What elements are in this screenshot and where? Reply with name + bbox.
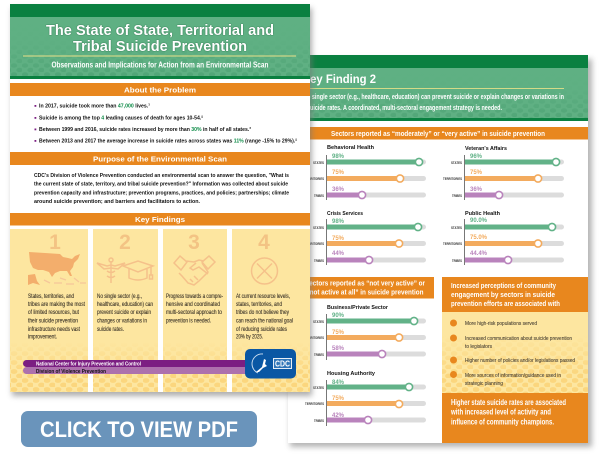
- panel: finding 1: of limited resources, but: [28, 310, 79, 316]
- chart: public health: Public Health: [465, 211, 501, 217]
- chart: business private sector: 58%: [332, 346, 345, 352]
- text block: purpose paragraph: around suicide prevention; and barriers and facilitators to action.: [34, 199, 200, 205]
- panel: finding 4: [232, 229, 310, 392]
- chart: veterans affairs: Veteran's Affairs: [465, 146, 507, 152]
- heading: active sectors: Sectors reported as “moderately” or “very active” in suicide prevention: [331, 131, 545, 138]
- chart: public health: STATES: [451, 226, 462, 230]
- heading: key findings: Key Findings: [135, 215, 185, 224]
- chart: business private sector: STATES: [313, 320, 324, 324]
- chart: veterans affairs: 75%: [470, 170, 483, 176]
- panel: finding 3: Progress towards a compre-: [166, 294, 223, 300]
- chart: public health: 90.0%: [470, 218, 488, 224]
- text block: problem bullets: Between 1999 and 2016, suicide rates increased by more than 30% in half of all states.³: [39, 126, 251, 133]
- panel: finding 1: their suicide prevention: [28, 318, 78, 324]
- chart: business private sector: TERRITORIES: [305, 336, 324, 340]
- panel: finding 1: improvement.: [28, 334, 57, 340]
- panel: community engagement sidebar: More high-risk populations served: [465, 321, 537, 327]
- chart: behavioral health: Behavioral Health: [327, 145, 375, 151]
- heading: inactive sectors: “not active at all” in suicide prevention: [306, 290, 424, 296]
- panel: community engagement sidebar: Increased communication about suicide prevention: [465, 336, 572, 342]
- chart: veterans affairs: STATES: [451, 161, 462, 165]
- icon: circled x: [252, 258, 278, 284]
- chart: public health: TERRITORIES: [443, 242, 462, 246]
- panel: finding 3: 3: [188, 231, 200, 254]
- panel: community engagement sidebar: prevention efforts are associated with: [451, 299, 560, 308]
- chart: veterans affairs: [443, 146, 564, 200]
- text block: purpose paragraph: [34, 173, 289, 205]
- chart: public health: TRIBES: [452, 259, 462, 263]
- panel: finding 4: 20% by 2025.: [236, 334, 263, 340]
- chart: crisis services: TRIBES: [314, 259, 324, 263]
- heading: purpose: Purpose of the Environmental Scan: [93, 154, 227, 164]
- subtitle: Observations and Implications for Action from an Environmental Scan: [52, 60, 269, 70]
- chart: crisis services: TERRITORIES: [305, 242, 324, 246]
- text block: purpose paragraph: the current state of state, territory, and tribal suicide prevention?" Information was collected about suicide: [34, 182, 288, 188]
- panel: finding 4: 4: [258, 231, 270, 254]
- footer: agency banner: Division of Violence Prevention: [36, 369, 106, 375]
- heading: about the problem: [10, 83, 310, 96]
- panel: finding 2: suicide rates.: [97, 327, 124, 333]
- panel: finding 3: prevention is needed.: [166, 318, 211, 324]
- chart: housing authority: 75%: [332, 396, 345, 402]
- icon: handshake: [174, 256, 215, 285]
- panel: finding 1: tribes are making the most: [28, 302, 85, 308]
- chart: behavioral health: [305, 145, 426, 200]
- logo: CDC: [245, 349, 296, 378]
- heading: key findings: [10, 213, 310, 226]
- panel: finding 2: No single sector (e.g.,: [97, 294, 142, 300]
- summary header band: [10, 4, 310, 79]
- chart: veterans affairs: TRIBES: [452, 194, 462, 198]
- logo: CDC: CDC: [275, 360, 290, 368]
- heading: inactive sectors: Sectors reported as “not very active” or: [305, 280, 425, 288]
- text block: problem bullets: Suicide is among the top 4 leading causes of death for ages 10-54.²: [39, 114, 203, 122]
- text block: problem bullets: [34, 102, 297, 144]
- panel: community engagement sidebar: Higher number of policies and/or legislations passed: [465, 358, 575, 364]
- chart: behavioral health: 98%: [332, 154, 345, 160]
- chart: business private sector: [305, 305, 426, 360]
- chart: behavioral health: TERRITORIES: [305, 177, 324, 181]
- text block: purpose paragraph: prevention capacity and infrastructure; prevention programs, practices, and policies; partnerships; climate: [34, 190, 289, 196]
- chart: crisis services: 75%: [332, 236, 345, 242]
- chart: business private sector: 90%: [332, 313, 345, 319]
- chart: housing authority: STATES: [313, 386, 324, 390]
- key finding 2 header band: suicide rates. A coordinated, multi-sectoral engagement strategy is needed.: [307, 105, 502, 112]
- panel: finding 3: multi-sectoral approach to: [166, 310, 223, 316]
- panel: community engagement sidebar: Higher state suicide rates are associated: [451, 398, 566, 407]
- footer: agency banner: National Center for Injury Prevention and Control: [36, 362, 141, 368]
- text block: purpose paragraph: CDC's Division of Violence Prevention conducted an environmental scan to answer the question, "What is: [34, 173, 289, 179]
- title: Tribal Suicide Prevention: [73, 39, 247, 55]
- text block: problem bullets: Between 2013 and 2017 the average increase in suicide rates across states was 11% (range -15% to 29%).²: [39, 138, 297, 144]
- key finding 2 header band: Key Finding 2: [302, 72, 376, 86]
- heading: purpose: [10, 152, 310, 165]
- chart: behavioral health: STATES: [313, 161, 324, 165]
- chart: housing authority: 42%: [332, 413, 345, 419]
- panel: finding 2: healthcare, education) can: [97, 302, 153, 308]
- panel: community engagement sidebar: strategic planning: [465, 381, 503, 387]
- panel: finding 1: [10, 229, 88, 392]
- chart: behavioral health: 36%: [332, 187, 345, 193]
- icon: caduceus and graduation cap: [97, 258, 153, 283]
- panel: finding 4: tribes do not believe they: [236, 310, 289, 316]
- panel: finding 2: [93, 229, 158, 392]
- chart: housing authority: TERRITORIES: [305, 402, 324, 406]
- chart: crisis services: Crisis Services: [327, 211, 363, 217]
- chart: veterans affairs: 96%: [470, 154, 483, 160]
- panel: key finding 2 page: [288, 55, 592, 447]
- chart: housing authority: Housing Authority: [327, 371, 376, 377]
- panel: finding 2: changes or variations in: [97, 318, 147, 324]
- panel: finding 3: hensive and coordinated: [166, 302, 220, 308]
- chart: crisis services: STATES: [313, 226, 324, 230]
- panel: finding 1: States, territories, and: [28, 294, 74, 300]
- button: click to view PDF: CLICK TO VIEW PDF: [40, 417, 238, 442]
- chart: veterans affairs: TERRITORIES: [443, 177, 462, 181]
- heading: inactive sectors: [288, 277, 434, 298]
- chart: business private sector: Business/Private Sector: [327, 305, 389, 311]
- panel: community engagement sidebar: influence of community champions.: [451, 418, 554, 426]
- button: click to view PDF: [21, 411, 257, 447]
- chart: public health: [443, 211, 564, 265]
- key finding 2 header band: [288, 55, 588, 121]
- heading: active sectors: [288, 127, 588, 140]
- panel: finding 2: 2: [119, 231, 131, 254]
- panel: community engagement sidebar: [442, 277, 588, 443]
- chart: behavioral health: 75%: [332, 170, 345, 176]
- chart: public health: 44.4%: [470, 251, 488, 257]
- chart: public health: 75.0%: [470, 235, 488, 241]
- panel: community engagement sidebar: More sources of information/guidance used in: [465, 373, 561, 379]
- chart: housing authority: [305, 371, 426, 426]
- chart: crisis services: 44%: [332, 251, 345, 257]
- chart: housing authority: 84%: [332, 380, 345, 386]
- footer: agency banner: [23, 360, 251, 375]
- chart: business private sector: TRIBES: [314, 353, 324, 357]
- icon: US map: [28, 252, 86, 285]
- panel: finding 4: can reach the national goal: [236, 318, 293, 324]
- chart: business private sector: 75%: [332, 330, 345, 336]
- panel: finding 3: [163, 229, 227, 392]
- panel: summary page: [10, 4, 312, 396]
- panel: community engagement sidebar: engagement by sectors in suicide: [451, 290, 555, 299]
- panel: community engagement sidebar: to legislators: [465, 344, 492, 350]
- title: The State of State, Territorial and: [46, 23, 274, 39]
- panel: finding 4: states, territories, and: [236, 302, 282, 308]
- panel: community engagement sidebar: with increased level of activity and: [450, 408, 551, 416]
- chart: veterans affairs: 36%: [470, 187, 483, 193]
- chart: crisis services: 98%: [332, 219, 345, 225]
- heading: about the problem: About the Problem: [124, 86, 196, 94]
- chart: housing authority: TRIBES: [314, 419, 324, 423]
- panel: finding 1: 1: [49, 231, 61, 254]
- panel: finding 4: At current resource levels,: [236, 294, 290, 300]
- chart: crisis services: [305, 211, 426, 265]
- panel: finding 4: of reducing suicide rates: [236, 327, 287, 333]
- title: [46, 23, 274, 55]
- chart: behavioral health: TRIBES: [314, 194, 324, 198]
- panel: community engagement sidebar: Increased perceptions of community: [451, 281, 557, 290]
- panel: finding 2: prevent suicide or explain: [97, 310, 151, 316]
- text block: problem bullets: In 2017, suicide took more than 47,000 lives.¹: [39, 102, 150, 110]
- panel: finding 1: infrastructure needs vast: [28, 327, 80, 333]
